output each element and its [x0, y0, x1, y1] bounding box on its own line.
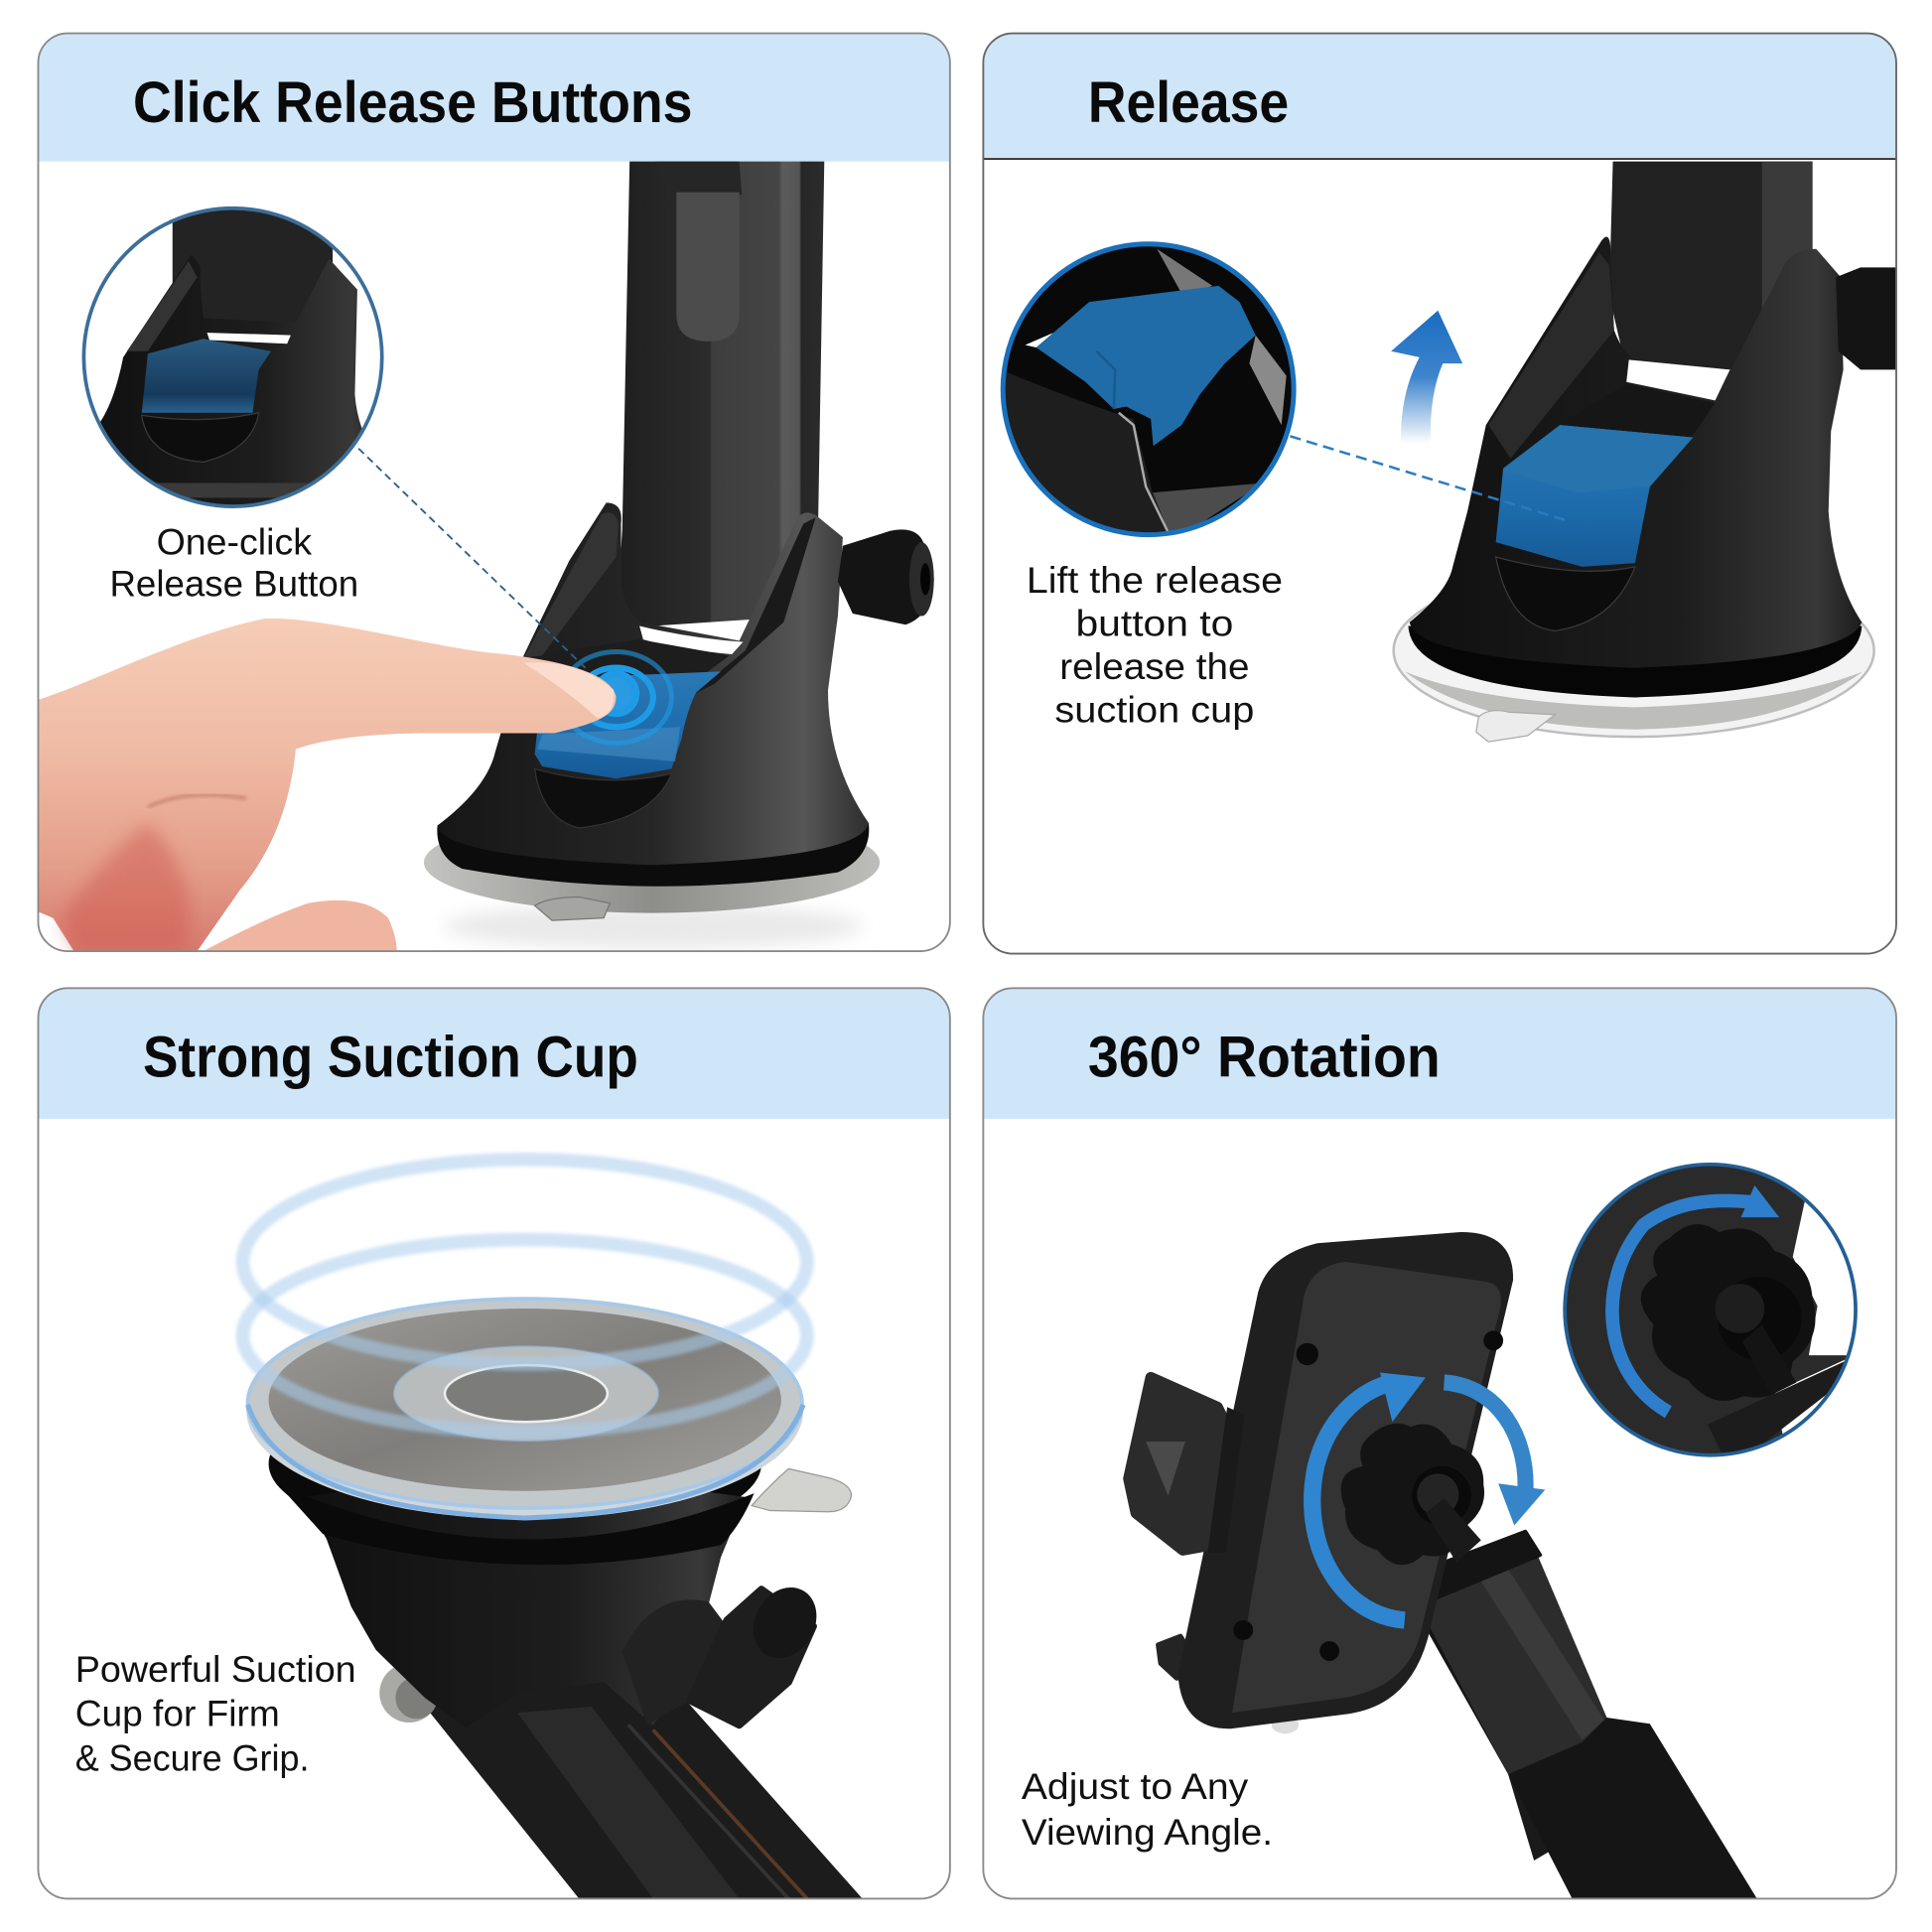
blue lifted button — [1496, 425, 1693, 567]
product: extension arm — [1392, 1532, 1757, 1898]
arrow: lift direction — [1391, 311, 1462, 444]
dashed leader line — [358, 449, 586, 668]
panel: click release buttons — [38, 34, 950, 951]
inset: lifted button close-up — [1001, 244, 1294, 537]
label: lift the release button: button to — [1075, 602, 1233, 643]
blue release button — [535, 671, 721, 778]
suction rings — [242, 1160, 807, 1432]
label: powerful suction cup: Powerful Suction — [75, 1648, 356, 1690]
label: adjust to any viewing angle — [1022, 1765, 1273, 1853]
label: one-click release button: One-click — [157, 520, 312, 562]
header band: click release buttons — [38, 34, 950, 162]
label: adjust to any viewing angle: Adjust to Any — [1022, 1765, 1249, 1807]
product: mount arm and base with button — [424, 162, 880, 949]
panel: strong suction cup — [38, 988, 950, 1898]
header band: release — [983, 34, 1896, 159]
label: lift the release button: Lift the release — [1027, 559, 1283, 601]
product arm — [425, 1663, 863, 1898]
inset: knob rotation close-up — [1565, 1165, 1861, 1460]
product cup body and knob — [268, 1454, 817, 1729]
hand pressing button — [38, 619, 617, 951]
label: one-click release button: Release Button — [109, 563, 358, 605]
arrow: tilt arc right — [1445, 1382, 1545, 1525]
header band: strong suction cup — [38, 988, 950, 1119]
heading: click release buttons: Click Release Buttons — [133, 70, 692, 135]
product: base with lifted button — [1394, 162, 1874, 742]
heading: release: Release — [1088, 70, 1289, 135]
suction cup disc — [246, 1299, 852, 1519]
product: phone holder — [1129, 1232, 1513, 1733]
label: lift the release button — [1027, 559, 1283, 730]
header band: 360 rotation — [983, 988, 1896, 1119]
arrow: rotation arc left — [1312, 1373, 1426, 1620]
knob and ball joint — [1341, 1424, 1484, 1565]
panel border — [983, 988, 1896, 1898]
label: powerful suction cup: Cup for Firm — [75, 1693, 280, 1734]
panel border — [983, 34, 1896, 954]
icon: press ripple rings — [561, 652, 671, 743]
panel border — [38, 34, 950, 951]
label: powerful suction cup — [75, 1648, 356, 1778]
icon: side knob — [1836, 267, 1896, 369]
label: adjust to any viewing angle: Viewing Angle. — [1022, 1811, 1273, 1853]
panel: release — [983, 34, 1896, 954]
dashed leader line — [1290, 436, 1565, 520]
label: lift the release button: suction cup — [1054, 688, 1254, 730]
panel: 360 rotation — [983, 988, 1896, 1898]
panel border — [38, 988, 950, 1898]
heading: 360 rotation: 360° Rotation — [1088, 1026, 1441, 1090]
label: powerful suction cup: & Secure Grip. — [75, 1736, 310, 1778]
icon: knob — [838, 529, 934, 624]
label: one-click release button — [109, 520, 358, 605]
inset: button close-up — [83, 204, 382, 517]
heading: strong suction cup: Strong Suction Cup — [143, 1026, 638, 1090]
label: lift the release button: release the — [1059, 645, 1249, 687]
